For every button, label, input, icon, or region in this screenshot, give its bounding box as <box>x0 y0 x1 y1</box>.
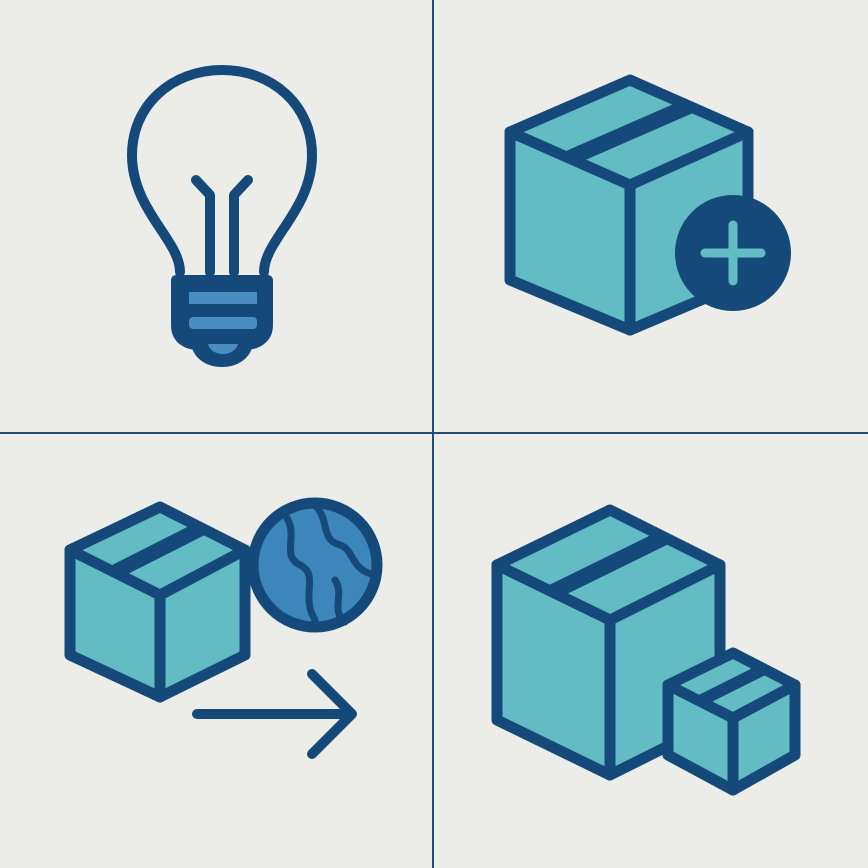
icon: box with globe and arrow <box>70 503 377 754</box>
icon: big and small boxes <box>497 510 795 790</box>
icon: lightbulb <box>132 70 312 362</box>
icon: box with plus <box>510 80 791 330</box>
arrow <box>197 674 352 754</box>
icon: globe <box>253 503 377 627</box>
